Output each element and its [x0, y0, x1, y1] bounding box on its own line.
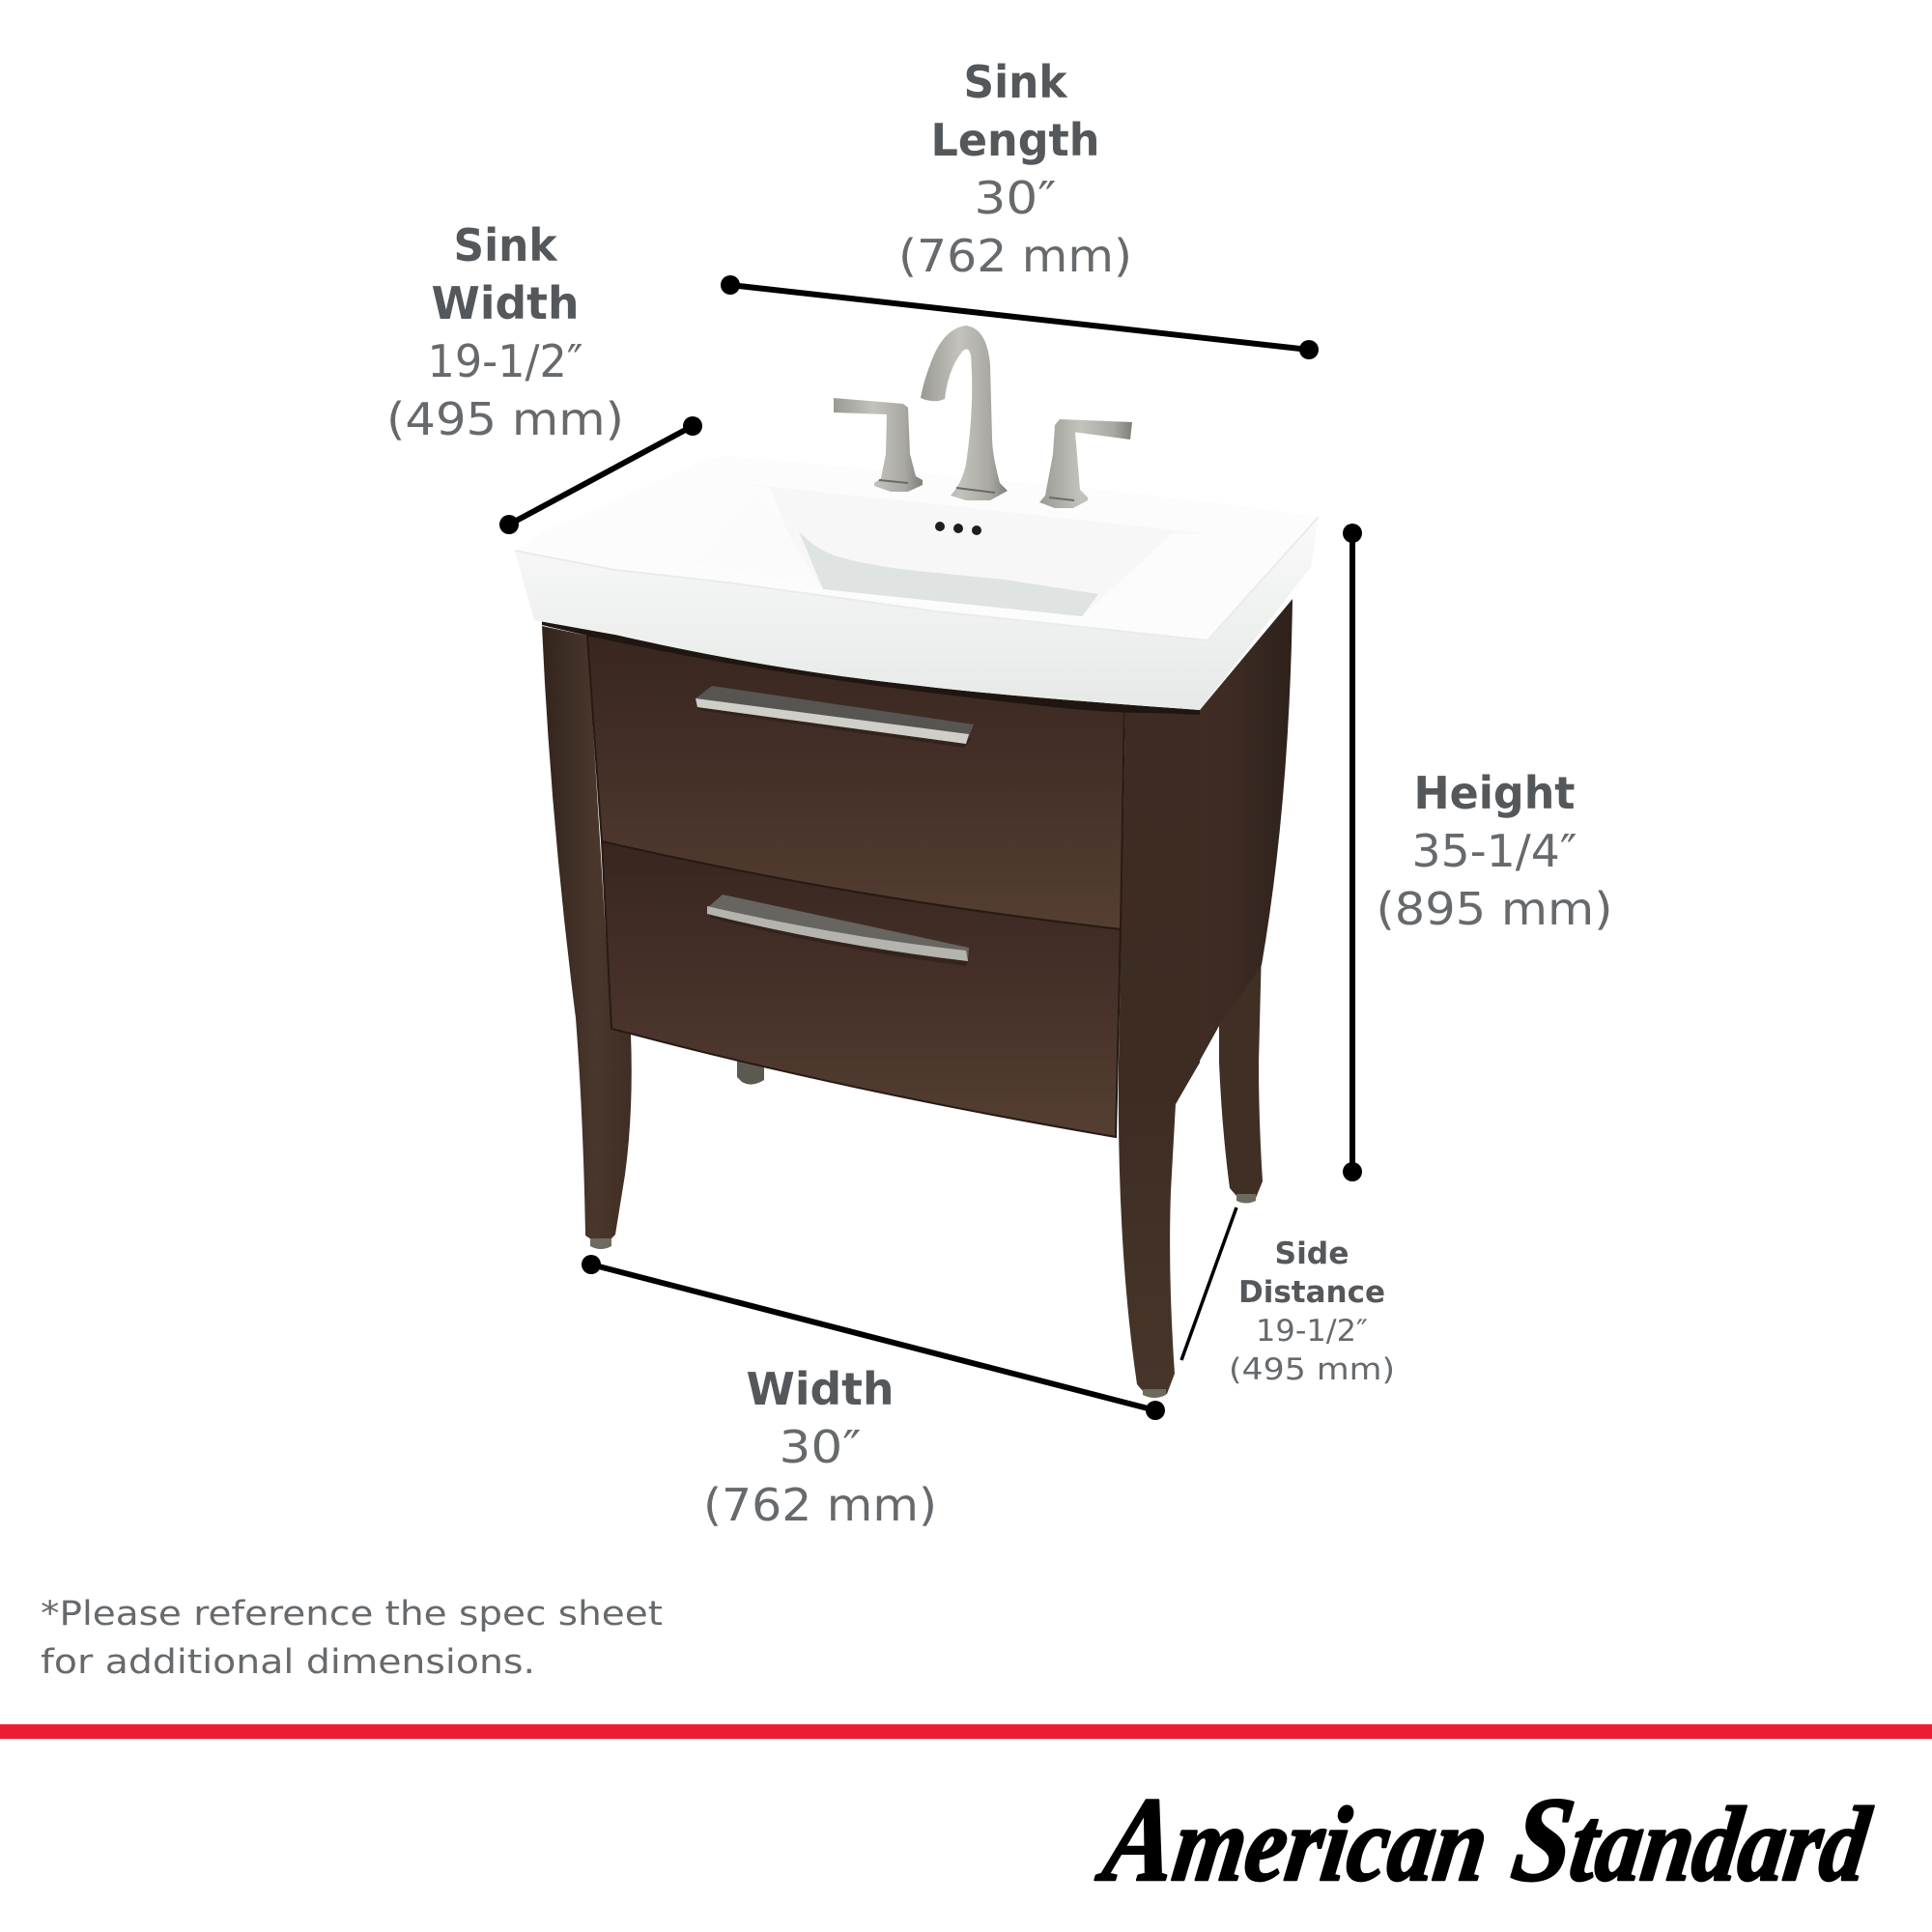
label: sink length: 30″	[974, 172, 1057, 224]
label: height: (895 mm)	[1376, 883, 1613, 935]
dimension line: side distance	[1181, 1208, 1236, 1360]
label: side distance: 19-1/2″	[1256, 1314, 1368, 1349]
right handle	[1039, 419, 1132, 508]
red divider bar	[0, 1724, 1932, 1739]
label: sink width: Width	[431, 277, 580, 329]
dimension line: sink width	[499, 416, 702, 534]
label: sink length: Sink	[964, 56, 1068, 108]
label: sink width	[386, 219, 624, 445]
dimension line: width	[582, 1255, 1165, 1420]
sink front face	[515, 517, 1319, 710]
basin back wall	[737, 483, 1205, 616]
foot glides	[590, 1194, 1256, 1398]
sink basin ceramic	[515, 456, 1319, 710]
footnote: *Please reference the spec sheet	[41, 1595, 663, 1634]
front right leg	[1119, 708, 1200, 1394]
side panel	[1121, 599, 1293, 1104]
vanity illustration	[515, 326, 1319, 1398]
overflow holes	[935, 522, 981, 535]
label: height	[1376, 767, 1613, 935]
lower drawer	[602, 841, 1121, 1137]
back right leg	[1219, 947, 1263, 1198]
dimension line: height	[1343, 524, 1362, 1181]
faucet	[834, 326, 1132, 508]
label: sink length	[898, 56, 1132, 282]
left handle	[834, 398, 923, 492]
label: width	[703, 1363, 937, 1531]
label: sink width: (495 mm)	[386, 393, 624, 445]
dimension line: sink length	[721, 275, 1319, 359]
footnote	[41, 1595, 663, 1682]
footnote: for additional dimensions.	[41, 1643, 535, 1682]
label: height: 35-1/4″	[1412, 825, 1577, 877]
lower handle	[707, 895, 970, 966]
front left leg and frame	[542, 626, 632, 1242]
upper handle	[696, 686, 974, 748]
logo: American Standard: American	[1091, 1774, 1497, 1907]
basin left slope	[696, 488, 821, 587]
label: sink width: 19-1/2″	[427, 335, 583, 387]
sink shadow	[542, 618, 1200, 715]
label: sink length: Length	[931, 114, 1099, 166]
label: sink length: (762 mm)	[898, 230, 1132, 282]
upper drawer	[587, 636, 1124, 929]
spout	[921, 326, 1008, 500]
label: side distance: Side	[1275, 1236, 1349, 1271]
label: sink width: Sink	[454, 219, 558, 271]
label: side distance: Distance	[1238, 1275, 1385, 1310]
basin floor	[799, 531, 1098, 616]
label: width: 30″	[779, 1421, 862, 1473]
label: width: Width	[746, 1363, 895, 1415]
logo: American Standard: Standard	[1505, 1774, 1879, 1907]
rear center foot	[737, 1061, 764, 1085]
label: height: Height	[1414, 767, 1575, 819]
logo: American Standard	[1091, 1774, 1879, 1907]
faucet base shadows	[879, 480, 1074, 500]
sink rim highlight	[515, 517, 1319, 640]
label: side distance	[1229, 1236, 1395, 1387]
label: width: (762 mm)	[703, 1479, 937, 1531]
label: side distance: (495 mm)	[1229, 1352, 1395, 1387]
